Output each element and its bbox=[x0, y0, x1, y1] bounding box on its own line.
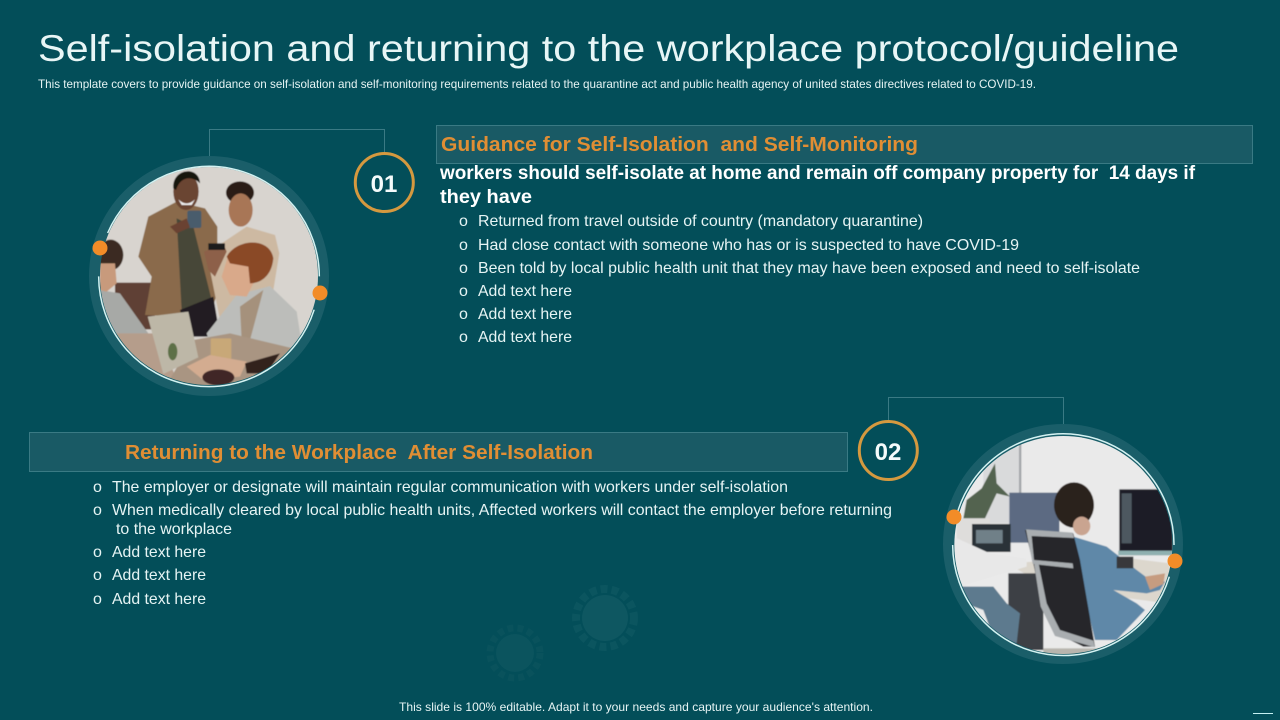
photo circle: office workers at computers bbox=[943, 424, 1183, 664]
section 1 lead text: workers should self-isolate at home and remain off company property for 14 days if bbox=[439, 163, 1196, 184]
section 2 bullet list: to the workplace bbox=[116, 521, 232, 538]
section 2 bullet list: o bbox=[93, 567, 102, 584]
badge 01 bbox=[355, 154, 413, 212]
section 1 bullet list bbox=[459, 213, 1140, 346]
orange dot left bbox=[946, 510, 962, 524]
connector: badge 02 to photo 2 bbox=[888, 398, 1064, 425]
section 2 heading: Returning to the Workplace After Self-Isolation bbox=[125, 442, 593, 464]
section 2 bullet list: o bbox=[93, 502, 102, 519]
section 1 lead text bbox=[439, 163, 1196, 208]
subtitle: This template covers to provide guidance on self-isolation and self-monitoring requirements related to the quarantine act and public health agency of united states directives related to COVID-19. bbox=[38, 77, 1036, 91]
section 1 bullet list: o bbox=[459, 237, 468, 254]
section 2 bullet list: The employer or designate will maintain regular communication with workers under self-isolation bbox=[112, 479, 788, 496]
section 2 header bar bbox=[30, 432, 848, 472]
section 2 bullet list: Add text here bbox=[112, 567, 206, 584]
section 2 bullet list: Add text here bbox=[112, 544, 206, 561]
badge 02 bbox=[859, 422, 917, 480]
orange dot left bbox=[92, 240, 108, 256]
white ring bbox=[953, 434, 1174, 656]
section 2 bullet list bbox=[93, 479, 892, 608]
orange dot right bbox=[312, 286, 328, 300]
section 1 bullet list: Had close contact with someone who has or is suspected to have COVID-19 bbox=[478, 237, 1019, 254]
section 2 bullet list: o bbox=[93, 479, 102, 496]
section 1 bullet list: o bbox=[459, 329, 468, 346]
section 2 bullet list: o bbox=[93, 544, 102, 561]
section 1 header bar bbox=[436, 126, 1252, 164]
photo: developer at monitors bbox=[950, 433, 1177, 662]
section 1 bullet list: Add text here bbox=[478, 306, 572, 323]
connector: photo 1 to badge 01 bbox=[210, 130, 384, 156]
section 1 bullet list: Returned from travel outside of country (mandatory quarantine) bbox=[478, 213, 923, 230]
section 2 bullet list: o bbox=[93, 591, 102, 608]
section 1 bullet list: o bbox=[459, 213, 468, 230]
section 2 bullet list: When medically cleared by local public health units, Affected workers will contact the employer before returning bbox=[112, 502, 892, 519]
footer note: This slide is 100% editable. Adapt it to your needs and capture your audience's attention. bbox=[399, 700, 873, 714]
section 1 bullet list: Been told by local public health unit that they may have been exposed and need to self-isolate bbox=[478, 260, 1140, 277]
section 1 lead text: they have bbox=[440, 187, 532, 208]
section 1 bullet list: Add text here bbox=[478, 329, 572, 346]
badge 01: 01 bbox=[371, 171, 397, 198]
page number mark bbox=[1253, 713, 1273, 714]
section 1 bullet list: o bbox=[459, 283, 468, 300]
section 1 bullet list: o bbox=[459, 260, 468, 277]
badge 02: 02 bbox=[875, 439, 901, 466]
background virus motifs bbox=[490, 589, 634, 678]
white ring bbox=[99, 166, 319, 387]
title: Self-isolation and returning to the workplace protocol/guideline bbox=[38, 28, 1179, 69]
orange dot right bbox=[1168, 554, 1182, 568]
section 1 bullet list: o bbox=[459, 306, 468, 323]
section 2 bullet list: Add text here bbox=[112, 591, 206, 608]
photo: colleagues around a laptop bbox=[93, 163, 327, 390]
section 1 heading: Guidance for Self-Isolation and Self-Monitoring bbox=[441, 134, 918, 156]
section 1 bullet list: Add text here bbox=[478, 283, 572, 300]
photo circle: team meeting bbox=[89, 156, 329, 396]
